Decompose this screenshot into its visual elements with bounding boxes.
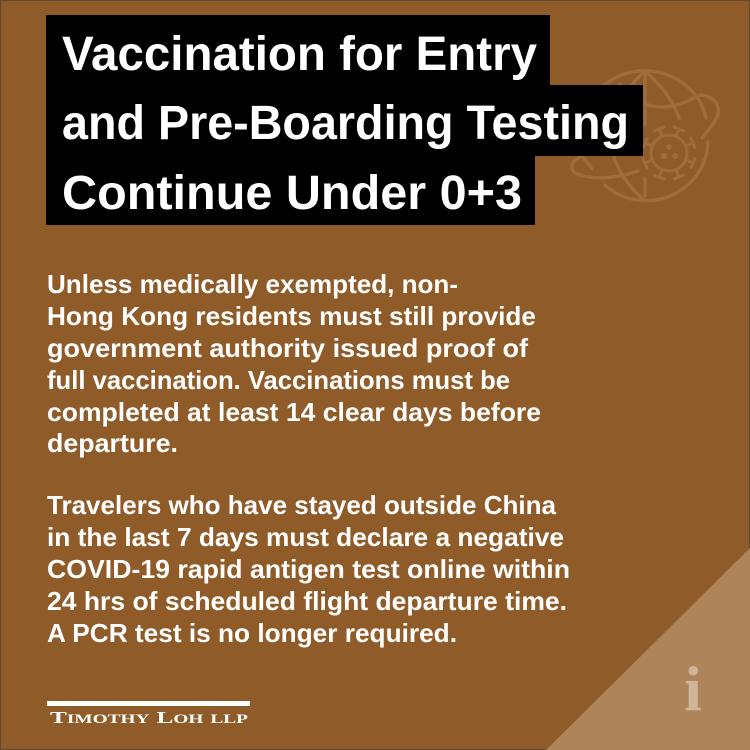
title line 2: and Pre-Boarding Testing [62, 97, 629, 150]
icon: globe with virus watermark [572, 71, 718, 201]
icon: info letter: i [684, 653, 702, 724]
text block: testing requirement: A PCR test is no longer required. [47, 618, 457, 648]
text block: vaccination requirement: completed at least 14 clear days before [47, 397, 541, 427]
text block: vaccination requirement: departure. [47, 428, 178, 458]
title line 1: Vaccination for Entry [62, 28, 537, 81]
text block: testing requirement: in the last 7 days must declare a negative [47, 522, 564, 552]
text block: vaccination requirement [47, 269, 541, 458]
text block: vaccination requirement: Hong Kong residents must still provide [47, 301, 536, 331]
text block: testing requirement: 24 hrs of scheduled flight departure time. [47, 586, 567, 616]
logo: Timothy Loh LLP: T imothy L oh llp [50, 707, 248, 728]
title [46, 15, 643, 225]
text block: vaccination requirement: government authority issued proof of [47, 333, 528, 363]
title line 3: Continue Under 0+3 [62, 167, 522, 220]
logo: Timothy Loh LLP [47, 701, 250, 728]
text block: testing requirement: Travelers who have stayed outside China [47, 490, 557, 520]
corner triangle with info icon [546, 548, 750, 750]
text block: testing requirement: COVID-19 rapid antigen test online within [47, 554, 570, 584]
text block: vaccination requirement: Unless medically exempted, non- [47, 269, 458, 299]
text block: vaccination requirement: full vaccination. Vaccinations must be [47, 365, 510, 395]
virus [643, 127, 695, 179]
text block: testing requirement [47, 490, 570, 648]
